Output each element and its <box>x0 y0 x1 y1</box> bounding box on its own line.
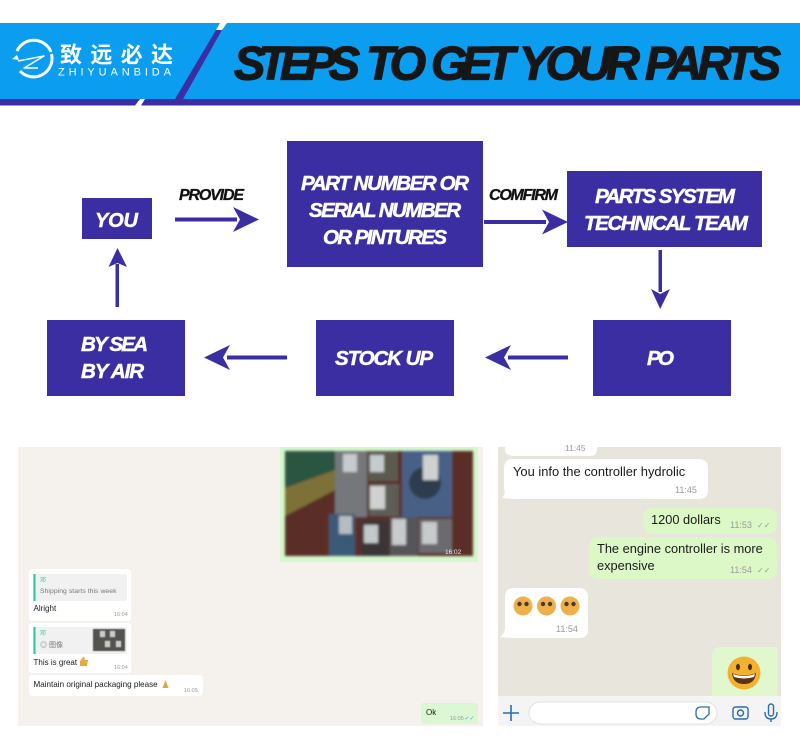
icon: sticker <box>696 707 709 719</box>
message: this is great: ◎ 图像 <box>40 640 63 649</box>
photo message: parts <box>280 447 478 562</box>
step: part number: SERIAL NUMBER <box>309 199 461 222</box>
message: you info: You info the controller hydrolic <box>513 464 686 479</box>
title: GET <box>431 36 519 90</box>
message: you info <box>502 459 708 499</box>
panel: left chat screenshot <box>18 447 483 726</box>
title: STEPS <box>234 36 360 90</box>
message: this is great: 16:04 <box>114 665 128 671</box>
header banner <box>0 23 800 106</box>
message: engine controller: The engine controller is more <box>597 541 763 556</box>
step: by sea by air <box>47 320 185 396</box>
logo latin name: ZHIYUANBIDA <box>58 66 172 78</box>
message: alright <box>29 569 131 621</box>
input bar <box>498 696 781 726</box>
step: stock up <box>316 320 454 396</box>
arrow: provide: PROVIDE <box>179 187 245 204</box>
step: parts system technical team: TECHNICAL TEAM <box>584 212 749 235</box>
logo <box>12 40 173 78</box>
title: YOUR <box>519 36 640 90</box>
step: parts system technical team <box>567 171 762 247</box>
message: 1200 dollars: 11:53 <box>730 520 752 530</box>
message: cut off: 11:45 <box>565 443 586 453</box>
message: maintain packaging <box>29 675 203 696</box>
arrow: provide <box>175 187 259 232</box>
message: ok: 16:05 <box>450 716 464 722</box>
message: this is great: 邓 <box>40 629 46 637</box>
icon: camera <box>733 707 748 719</box>
step: PO <box>593 320 731 396</box>
message: this is great <box>29 623 131 673</box>
message: 1200 dollars: 1200 dollars <box>651 512 721 527</box>
logo chinese name: 致远必达 <box>60 42 173 68</box>
arrow: up to YOU <box>108 248 127 307</box>
message: alright: 16:04 <box>114 612 128 618</box>
step: part number: PART NUMBER OR <box>301 172 469 195</box>
message: grinning emoji <box>712 647 777 696</box>
message: cut off <box>505 443 597 456</box>
message: engine controller: expensive <box>597 558 655 573</box>
arrow: to stock up <box>485 345 568 370</box>
title: TO <box>366 36 426 90</box>
panel: right chat screenshot <box>498 443 781 726</box>
step: PO: PO <box>647 347 674 370</box>
step: stock up: STOCK UP <box>335 347 433 370</box>
step: by sea by air: BY AIR <box>81 360 144 383</box>
step: by sea by air: BY SEA <box>81 333 148 356</box>
title <box>234 36 781 90</box>
message: alright: Alright <box>34 604 57 613</box>
message: ok <box>421 703 478 724</box>
icon: microphone <box>765 704 777 722</box>
text input field <box>529 702 717 724</box>
step: YOU: YOU <box>95 210 139 232</box>
message: engine controller: ✓✓ <box>757 566 770 575</box>
message: alright: 邓 <box>40 576 46 584</box>
message: maintain packaging: 16:05 <box>184 688 198 694</box>
photo message: parts: 16:02 <box>445 549 462 556</box>
message: pleading emojis <box>500 588 588 638</box>
step: part number: OR PINTURES <box>323 226 447 249</box>
icon: logo emblem <box>12 40 52 77</box>
step: part number <box>287 141 483 267</box>
step: YOU <box>82 198 152 239</box>
message: ok: Ok <box>426 708 437 717</box>
message: this is great: This is great <box>34 658 78 667</box>
message: you info: 11:45 <box>675 485 697 495</box>
title: PARTS <box>645 36 781 90</box>
message: engine controller: 11:54 <box>730 565 752 575</box>
icon: plus <box>503 705 519 721</box>
arrow: down to PO <box>651 250 670 309</box>
message: engine controller <box>589 537 777 579</box>
arrow: comfirm <box>484 187 568 234</box>
message: ok: ✓✓ <box>464 715 475 722</box>
arrow: to by sea by air <box>204 345 287 370</box>
message: 1200 dollars: ✓✓ <box>757 521 770 530</box>
message: pleading emojis: 11:54 <box>556 624 578 634</box>
message: 1200 dollars <box>643 508 777 534</box>
message: maintain packaging: Maintain original packaging please <box>34 680 158 689</box>
message: alright: Shipping starts this week <box>40 588 117 595</box>
arrow: comfirm: COMFIRM <box>489 187 559 204</box>
step: parts system technical team: PARTS SYSTEM <box>595 185 736 208</box>
